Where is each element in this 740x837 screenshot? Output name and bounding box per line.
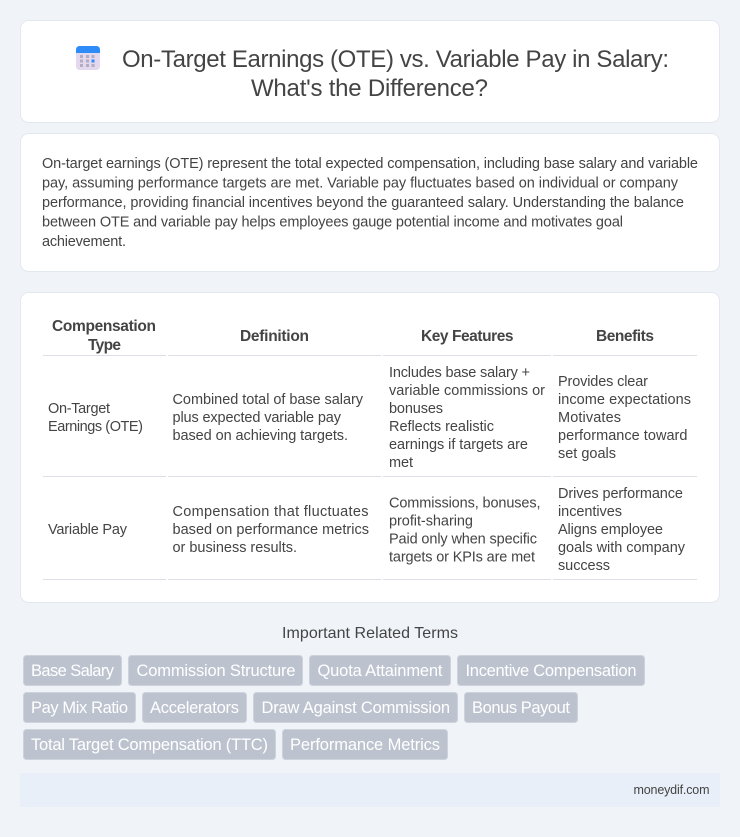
tag: Bonus Payout xyxy=(464,692,578,722)
panel: intro text xyxy=(20,134,720,272)
table row: On-Target Earnings: plus expected variable pay xyxy=(172,410,342,426)
table row: Variable Pay: success xyxy=(558,558,610,574)
header panel xyxy=(20,20,720,122)
panel: comparison table xyxy=(20,292,720,602)
heading: Important Related Terms: Important Related Terms xyxy=(282,625,458,642)
tag: Draw Against Commission xyxy=(254,692,458,722)
table header: Compensation xyxy=(52,318,156,335)
table row: Variable Pay: Drives performance xyxy=(558,486,683,502)
tag: Pay Mix Ratio: Pay Mix Ratio xyxy=(31,699,128,717)
tag: Total Target Compensation (TTC): Total Target Compensation (TTC) xyxy=(31,736,268,754)
table row: Variable Pay: goals with company xyxy=(558,540,686,556)
tag: Base Salary xyxy=(24,656,122,686)
tag: Quota Attainment xyxy=(310,656,450,686)
table row: Variable Pay: Aligns employee xyxy=(558,522,663,538)
table row: Variable Pay: Variable Pay xyxy=(48,522,128,538)
table row: On-Target Earnings: met xyxy=(389,455,413,471)
table row: On-Target Earnings: Earnings (OTE) xyxy=(48,419,143,435)
tag: Performance Metrics xyxy=(282,730,448,760)
tag: Accelerators: Accelerators xyxy=(150,699,239,717)
table row: On-Target Earnings: variable commissions or xyxy=(389,383,545,399)
table row: On-Target Earnings: Provides clear xyxy=(558,374,648,390)
tag: Incentive Compensation: Incentive Compensation xyxy=(466,662,636,680)
tag: Performance Metrics: Performance Metrics xyxy=(290,736,440,754)
title: On-Target Earnings (OTE) vs. Variable Pay in Salary: xyxy=(122,46,669,73)
footer source: moneydif.com xyxy=(634,783,710,797)
tag: Base Salary: Base Salary xyxy=(31,662,115,680)
intro paragraph xyxy=(42,156,698,250)
table row: On-Target Earnings xyxy=(48,365,691,471)
table row: On-Target Earnings: performance toward xyxy=(558,428,688,444)
table row: On-Target Earnings: Motivates xyxy=(558,410,621,426)
title xyxy=(122,46,669,102)
table row: On-Target Earnings: Combined total of base salary xyxy=(172,392,364,408)
intro paragraph: achievement. xyxy=(42,234,126,250)
table header xyxy=(52,318,654,354)
tag: Total Target Compensation (TTC) xyxy=(24,730,276,760)
table header: Key Features xyxy=(421,328,514,345)
tag: Quota Attainment: Quota Attainment xyxy=(318,662,443,680)
intro paragraph: pay, assuming performance targets are met. Variable pay fluctuates based on individual or company xyxy=(42,176,679,192)
table row: Variable Pay xyxy=(48,486,686,574)
table row: Variable Pay: targets or KPIs are met xyxy=(389,550,535,566)
table header: Type xyxy=(88,337,121,354)
related term tags xyxy=(24,656,644,760)
table row: On-Target Earnings: bonuses xyxy=(389,401,443,417)
tag: Accelerators xyxy=(142,692,246,722)
tag: Bonus Payout: Bonus Payout xyxy=(472,699,570,717)
intro paragraph: On-target earnings (OTE) represent the total expected compensation, including base salary and variable xyxy=(42,156,698,172)
tag: Incentive Compensation xyxy=(458,656,644,686)
tag: Draw Against Commission: Draw Against Commission xyxy=(262,699,450,717)
tag: Commission Structure: Commission Structure xyxy=(136,662,296,680)
table row: Variable Pay: or business results. xyxy=(172,540,297,556)
tag: Commission Structure xyxy=(128,656,302,686)
table row: Variable Pay: profit-sharing xyxy=(389,514,473,530)
table row: Variable Pay: Compensation that fluctuates xyxy=(172,504,368,520)
table header: Definition xyxy=(240,328,309,345)
tag: Pay Mix Ratio xyxy=(24,692,136,722)
icon: calendar xyxy=(76,46,100,70)
table row: On-Target Earnings: earnings if targets are xyxy=(389,437,528,453)
table row: Variable Pay: incentives xyxy=(558,504,622,520)
footer bar xyxy=(20,773,720,807)
table row: On-Target Earnings: Reflects realistic xyxy=(389,419,494,435)
table row: On-Target Earnings: On-Target xyxy=(48,401,110,417)
table row: Variable Pay: Paid only when specific xyxy=(389,532,537,548)
title: What's the Difference? xyxy=(251,75,488,102)
table row: Variable Pay: Commissions, bonuses, xyxy=(389,496,540,512)
table row: On-Target Earnings: based on achieving targets. xyxy=(172,428,348,444)
table row: On-Target Earnings: Includes base salary + xyxy=(389,365,530,381)
table row: Variable Pay: based on performance metrics xyxy=(172,522,369,538)
table header: Benefits xyxy=(596,328,654,345)
table row: On-Target Earnings: income expectations xyxy=(558,392,691,408)
table row: On-Target Earnings: set goals xyxy=(558,446,616,462)
intro paragraph: performance, providing financial incentives beyond the guaranteed salary. Understanding the balance xyxy=(42,195,684,211)
intro paragraph: between OTE and variable pay helps employees gauge potential income and motivates goal xyxy=(42,214,623,230)
